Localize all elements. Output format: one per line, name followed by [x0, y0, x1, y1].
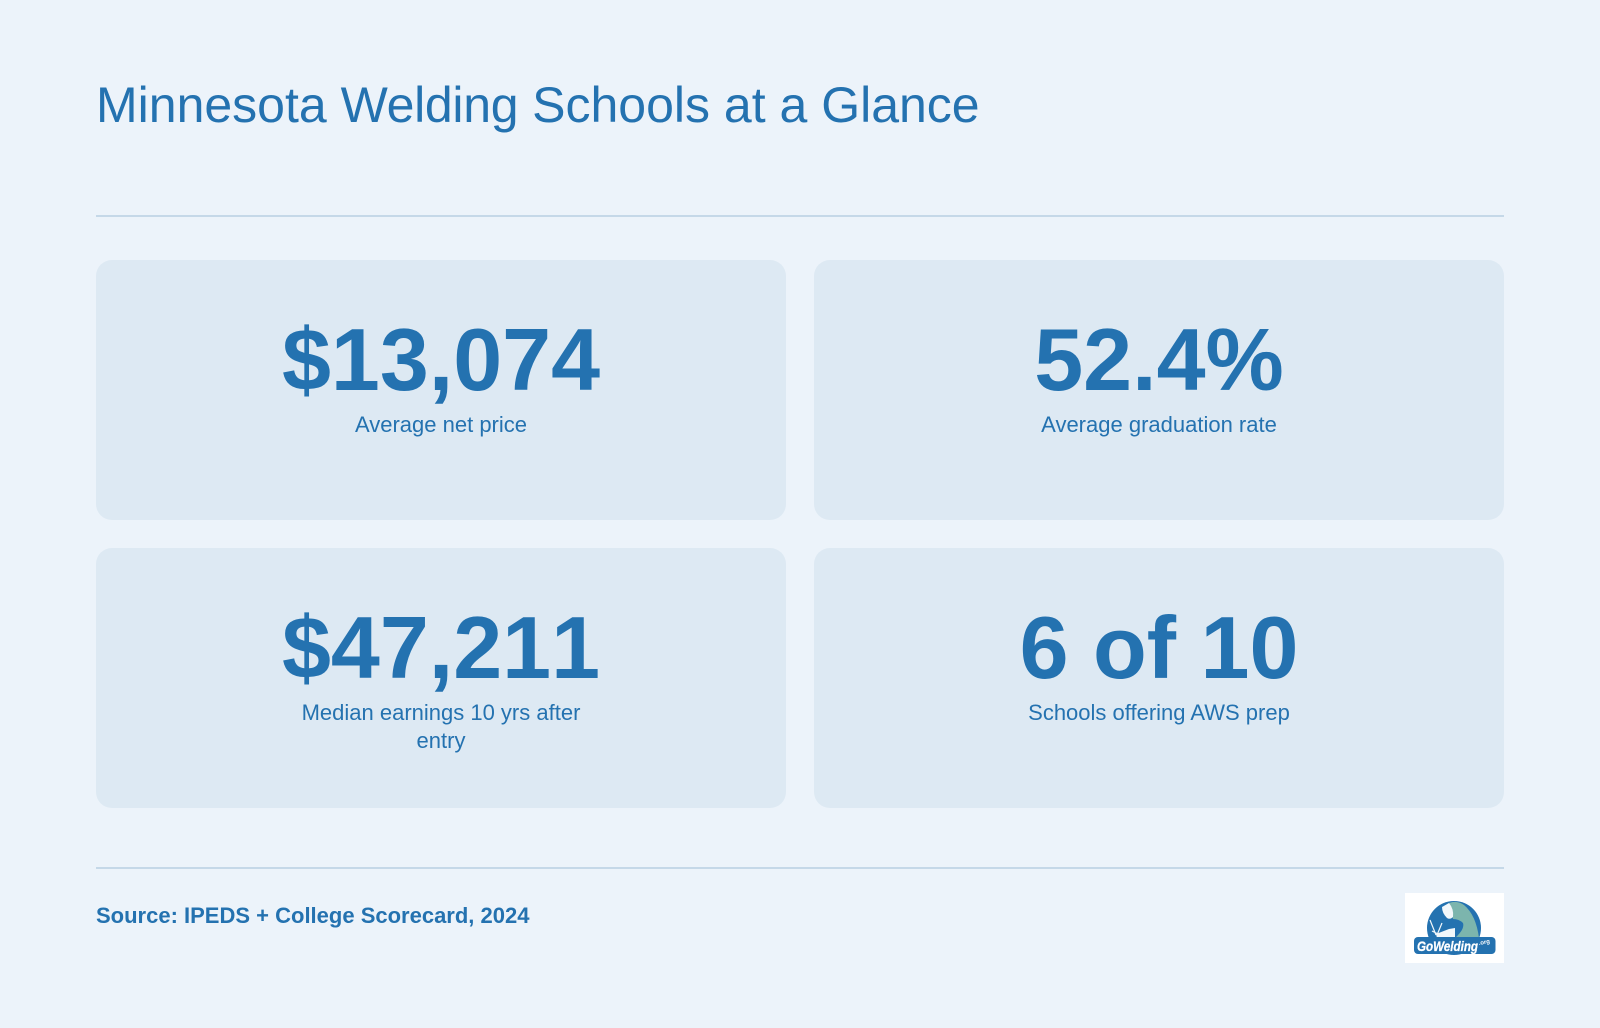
stat label: median earnings: Median earnings 10 yrs after entry: [302, 700, 580, 753]
panel: median earnings: [96, 548, 786, 808]
banner: GoWelding wordmark: GoWelding: [1417, 938, 1478, 954]
panel: schools offering AWS prep: [814, 548, 1504, 808]
stat value: net price: $13,074: [282, 310, 600, 409]
stat label: AWS prep schools: Schools offering AWS prep: [1028, 700, 1290, 725]
panel: average graduation rate: [814, 260, 1504, 520]
banner: GoWelding wordmark: .org: [1478, 939, 1491, 947]
source note: Source: IPEDS + College Scorecard, 2024: [96, 903, 529, 928]
title: Minnesota Welding Schools at a Glance: [96, 77, 980, 133]
stat label: net price: Average net price: [355, 412, 527, 437]
panel: average net price: [96, 260, 786, 520]
stat label: graduation rate: Average graduation rate: [1041, 412, 1277, 437]
stat value: AWS prep schools: 6 of 10: [1020, 598, 1298, 697]
stat value: graduation rate: 52.4%: [1034, 310, 1284, 409]
icon: welder dome: [1427, 901, 1481, 955]
stat value: median earnings: $47,211: [282, 598, 600, 697]
logo: GoWelding.org: [1405, 893, 1504, 963]
